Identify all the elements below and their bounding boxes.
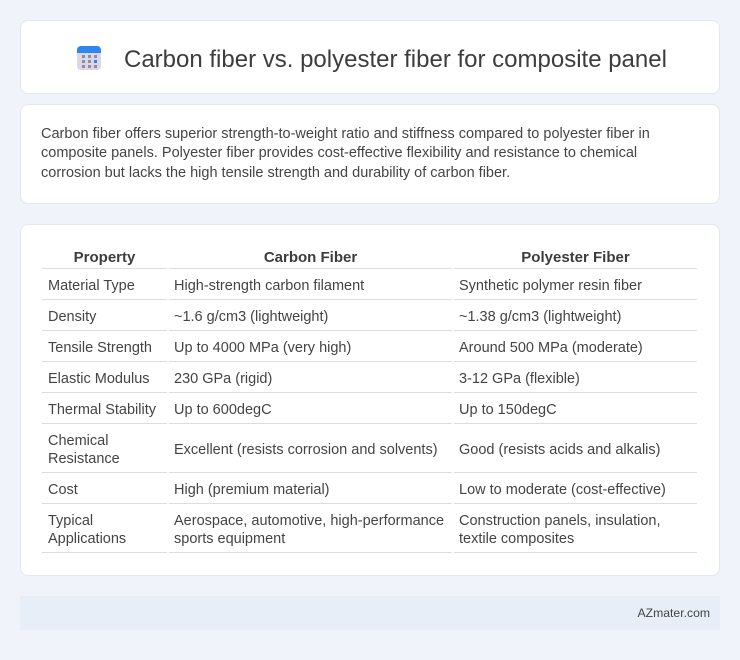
summary text: corrosion but lacks the high tensile strength and durability of carbon fiber. — [41, 165, 510, 181]
comparison table: Applications — [48, 531, 126, 547]
comparison table: Resistance — [48, 451, 120, 467]
summary text: Carbon fiber offers superior strength-to-weight ratio and stiffness compared to polyester fiber in — [41, 126, 650, 142]
comparison table: Typical — [48, 513, 93, 529]
table header — [74, 249, 630, 266]
comparison table: ~1.38 g/cm3 (lightweight) — [459, 309, 621, 325]
comparison table: Tensile Strength — [48, 340, 152, 356]
header panel — [20, 20, 720, 94]
comparison table — [42, 249, 697, 553]
comparison table: Material Type — [48, 278, 135, 294]
comparison table: 3-12 GPa (flexible) — [459, 371, 580, 387]
comparison table panel — [20, 224, 720, 576]
summary panel — [20, 104, 720, 204]
comparison table: Good (resists acids and alkalis) — [459, 442, 660, 458]
comparison table: Up to 150degC — [459, 402, 557, 418]
comparison table: High (premium material) — [174, 482, 330, 498]
comparison table: Up to 4000 MPa (very high) — [174, 340, 351, 356]
comparison table: Thermal Stability — [48, 402, 156, 418]
comparison table: Elastic Modulus — [48, 371, 150, 387]
comparison table: sports equipment — [174, 531, 285, 547]
comparison table: Low to moderate (cost-effective) — [459, 482, 666, 498]
comparison table: Cost — [48, 482, 78, 498]
comparison table: Excellent (resists corrosion and solvents) — [174, 442, 438, 458]
comparison table: Up to 600degC — [174, 402, 272, 418]
comparison table: ~1.6 g/cm3 (lightweight) — [174, 309, 328, 325]
table header: Carbon Fiber — [264, 249, 357, 266]
footer bar — [20, 596, 720, 630]
comparison table: Around 500 MPa (moderate) — [459, 340, 643, 356]
icon: calendar — [77, 46, 101, 70]
comparison table: Density — [48, 309, 96, 325]
comparison table: Chemical — [48, 433, 108, 449]
comparison table: Construction panels, insulation, — [459, 513, 661, 529]
comparison table: Aerospace, automotive, high-performance — [174, 513, 444, 529]
comparison table: High-strength carbon filament — [174, 278, 364, 294]
comparison table: Synthetic polymer resin fiber — [459, 278, 642, 294]
table header: Property — [74, 249, 135, 266]
footer credit: AZmater.com — [638, 606, 710, 620]
table header: Polyester Fiber — [521, 249, 630, 266]
title: Carbon fiber vs. polyester fiber for composite panel — [124, 46, 667, 73]
comparison table: textile composites — [459, 531, 574, 547]
summary text — [41, 126, 650, 181]
summary text: composite panels. Polyester fiber provides cost-effective flexibility and resistance to chemical — [41, 145, 637, 161]
comparison table: 230 GPa (rigid) — [174, 371, 272, 387]
